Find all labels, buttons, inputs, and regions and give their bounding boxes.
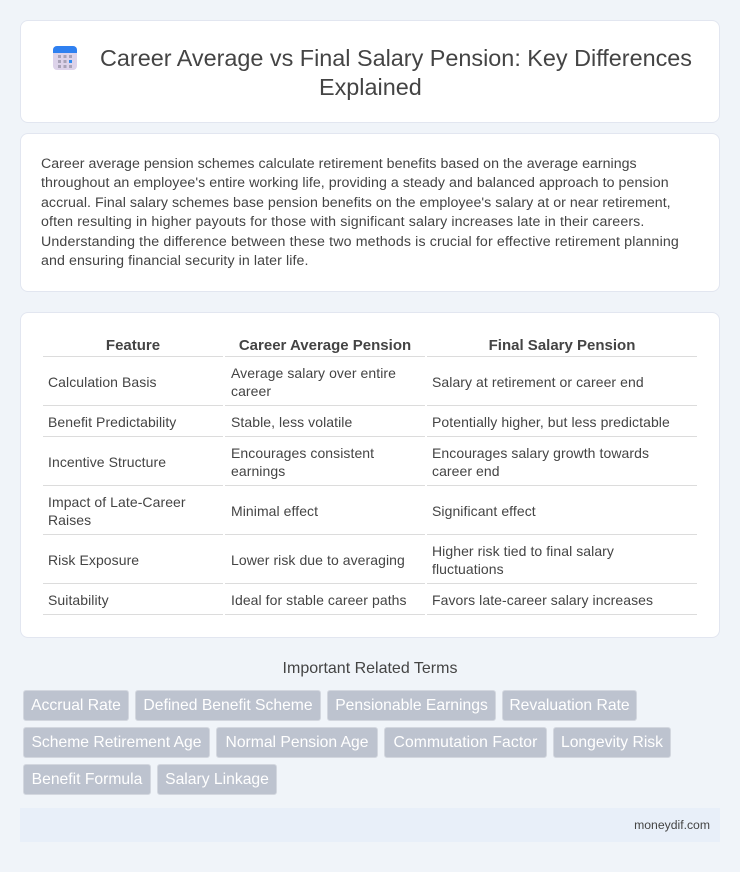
row: calculation basis: career <box>231 383 271 399</box>
footer source: moneydif.com <box>634 818 710 832</box>
title <box>100 45 692 100</box>
row: calculation basis: Average salary over entire <box>231 365 396 381</box>
row: impact of late-career raises <box>48 494 536 528</box>
row: risk exposure: Risk Exposure <box>48 552 139 568</box>
title: Explained <box>319 74 422 100</box>
row: risk exposure: fluctuations <box>432 561 504 577</box>
row: impact of late-career raises: Raises <box>48 512 91 528</box>
row: suitability <box>48 592 653 608</box>
row: suitability: Favors late-career salary increases <box>432 592 653 608</box>
row: calculation basis <box>48 365 644 399</box>
panel: comparison table <box>20 312 720 638</box>
related terms tags: Defined Benefit Scheme <box>143 697 313 714</box>
row: risk exposure: Higher risk tied to final salary <box>432 543 614 559</box>
row: impact of late-career raises: Impact of Late-Career <box>48 494 186 510</box>
text block: introduction: Career average pension schemes calculate retirement benefits based on the average earnings <box>41 156 637 172</box>
text block: introduction: accrual. Final salary schemes base pension benefits on the employee's salary at or near retirement, <box>41 195 671 211</box>
row: incentive structure: Incentive Structure <box>48 454 166 470</box>
row: incentive structure: career end <box>432 463 500 479</box>
row: risk exposure <box>48 543 614 577</box>
related terms tags <box>23 690 671 795</box>
related terms tags: Salary Linkage <box>165 771 269 788</box>
row: calculation basis: Salary at retirement or career end <box>432 374 644 390</box>
table header: Final Salary Pension <box>489 337 635 354</box>
related terms tags: Commutation Factor <box>394 734 537 751</box>
text block: introduction: and ensuring financial security in later life. <box>41 253 309 269</box>
table header: Feature <box>106 337 160 354</box>
related terms tags: Benefit Formula <box>32 771 142 788</box>
row: incentive structure: Encourages salary growth towards <box>432 445 649 461</box>
related terms tags: Revaluation Rate <box>509 697 630 714</box>
footer bar <box>20 808 720 842</box>
text block: introduction: often resulting in higher payouts for those with significant salary increases late in their careers. <box>41 214 644 230</box>
row: benefit predictability: Benefit Predictability <box>48 414 176 430</box>
comparison table <box>43 337 697 615</box>
panel: introduction <box>20 133 720 292</box>
row: incentive structure: Encourages consistent <box>231 445 374 461</box>
row: benefit predictability: Stable, less volatile <box>231 414 352 430</box>
text block: introduction: Understanding the difference between these two methods is crucial for effective retirement planning <box>41 234 679 250</box>
related terms tags: Longevity Risk <box>561 734 663 751</box>
row: benefit predictability: Potentially higher, but less predictable <box>432 414 670 430</box>
panel: title header <box>20 20 720 123</box>
row: calculation basis: Calculation Basis <box>48 374 157 390</box>
table header <box>106 337 635 354</box>
row: incentive structure <box>48 445 649 479</box>
row: suitability: Ideal for stable career paths <box>231 592 407 608</box>
table header: Career Average Pension <box>239 337 411 354</box>
related terms tags: Normal Pension Age <box>225 734 368 751</box>
text block: introduction <box>41 156 679 269</box>
related terms tags: Scheme Retirement Age <box>31 734 202 751</box>
row: incentive structure: earnings <box>231 463 285 479</box>
related terms tags: Accrual Rate <box>31 697 121 714</box>
row: benefit predictability <box>48 414 670 430</box>
row: impact of late-career raises: Significant effect <box>432 503 536 519</box>
text block: introduction: throughout an employee's entire working life, providing a steady and balanced approach to pension <box>41 175 669 191</box>
heading: related terms: Important Related Terms <box>283 660 457 677</box>
related terms tags: Pensionable Earnings <box>335 697 488 714</box>
row: risk exposure: Lower risk due to averaging <box>231 552 405 568</box>
title: Career Average vs Final Salary Pension: Key Differences <box>100 45 692 71</box>
icon: calendar <box>53 46 77 70</box>
row: suitability: Suitability <box>48 592 109 608</box>
row: impact of late-career raises: Minimal effect <box>231 503 318 519</box>
